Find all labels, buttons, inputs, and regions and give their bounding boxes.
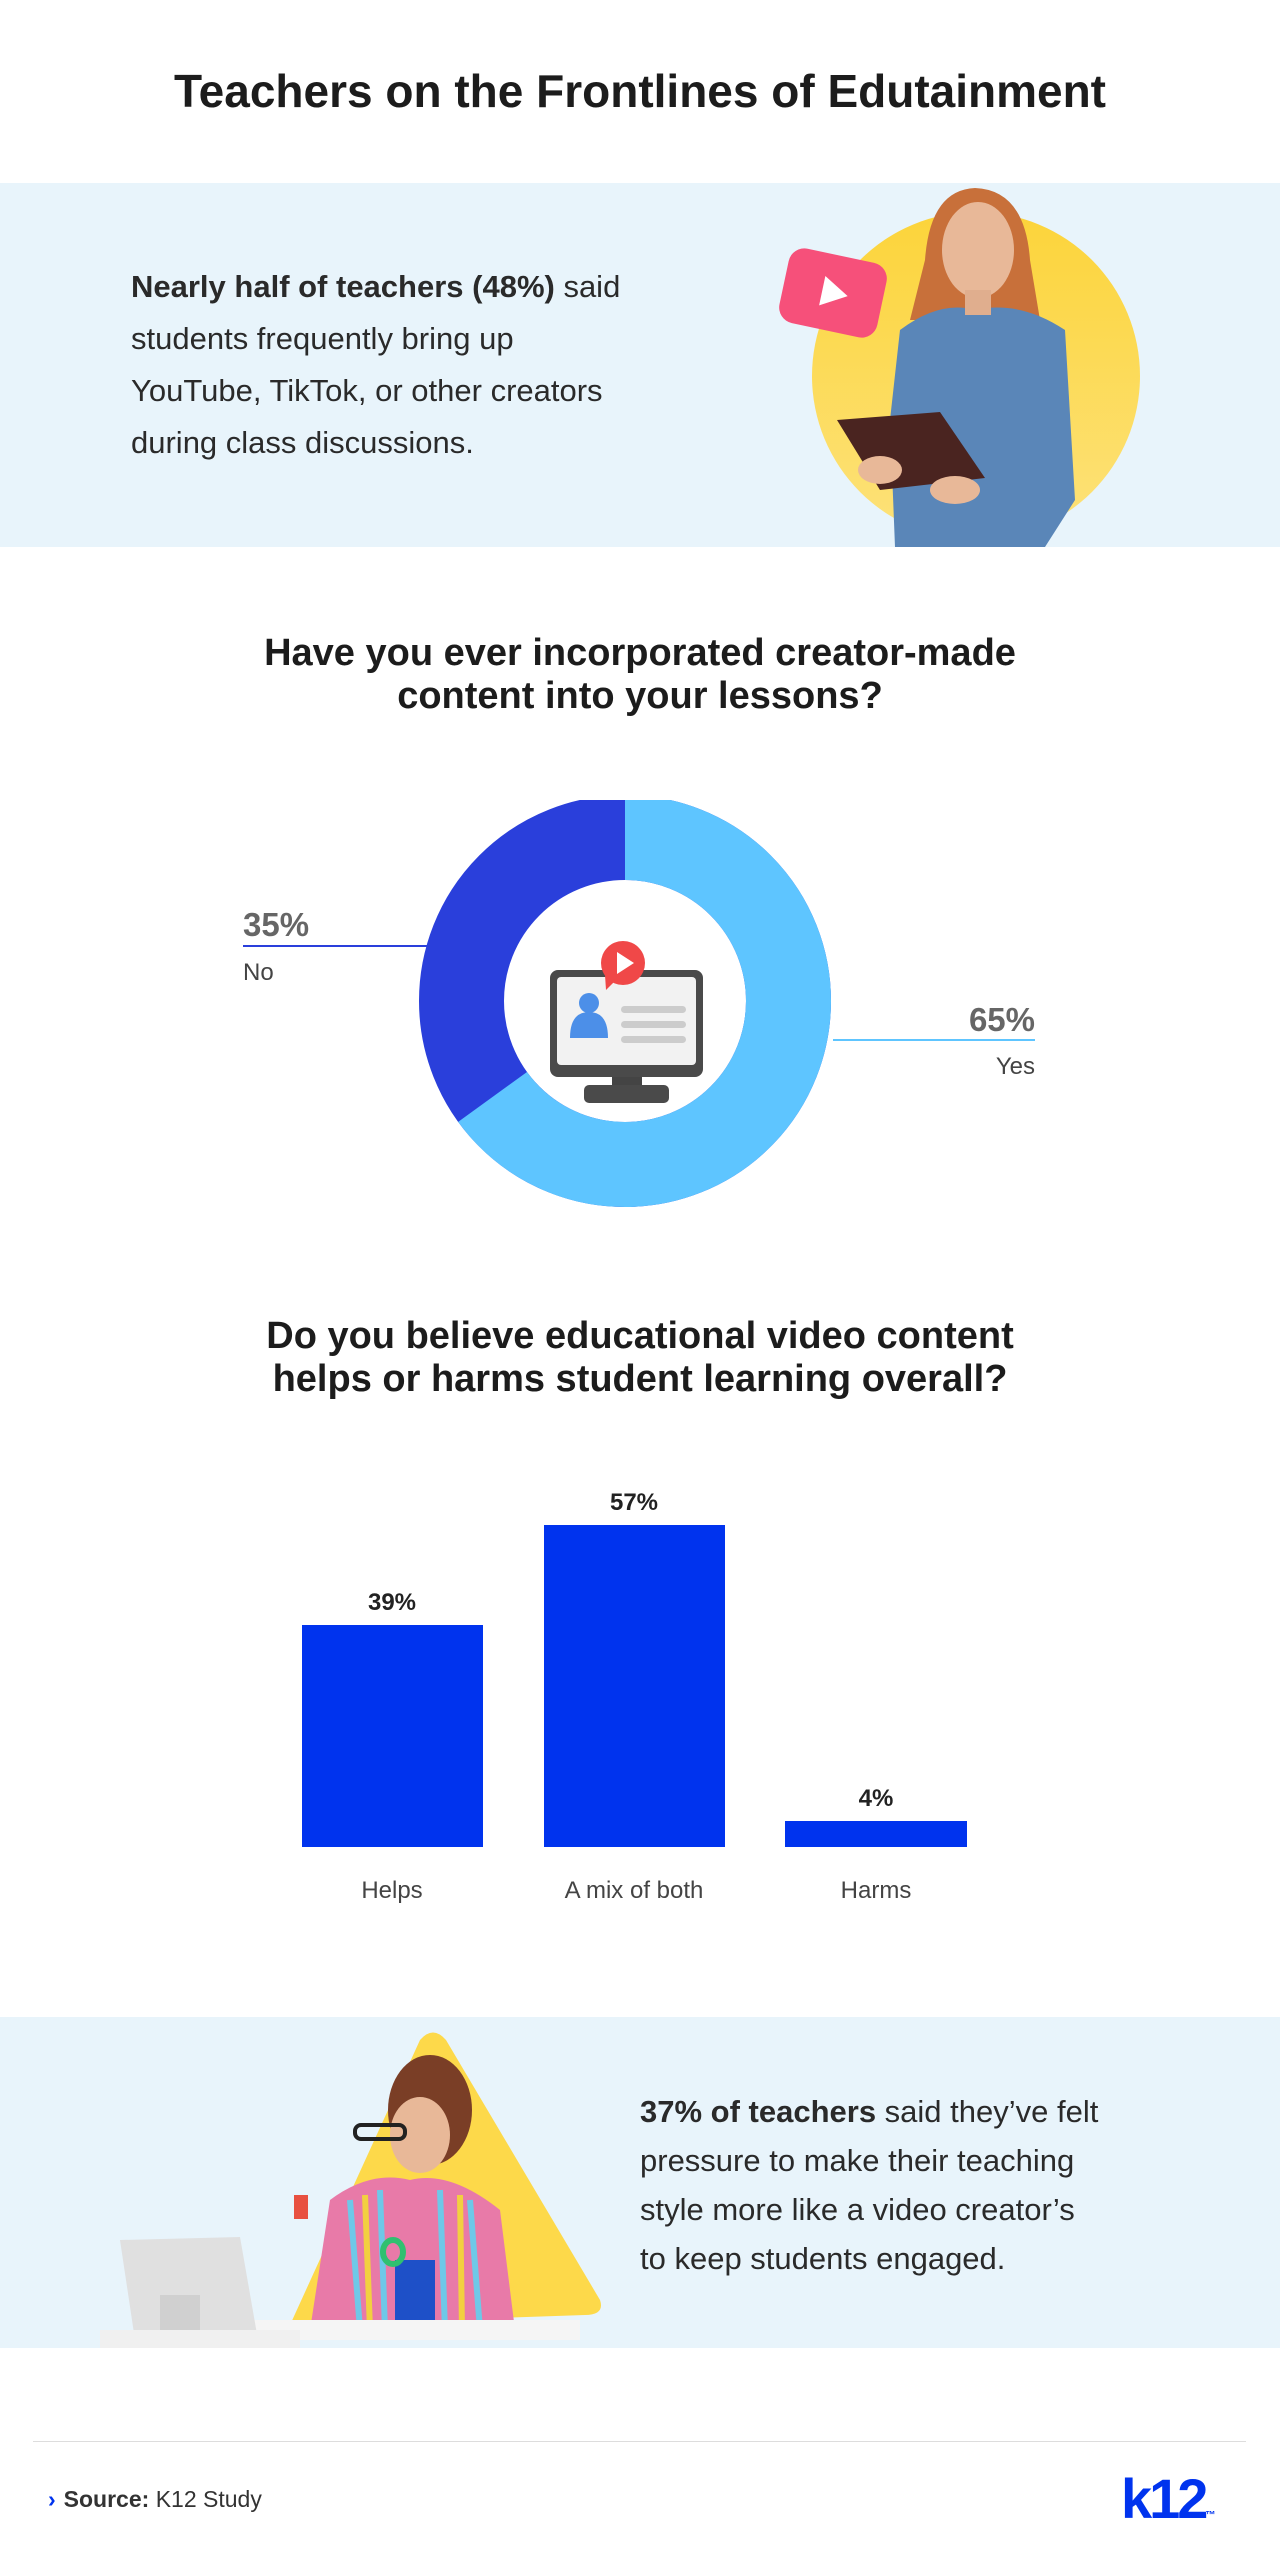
text block: 48% stat: YouTube, TikTok, or other creators (131, 373, 603, 408)
hair (910, 188, 1040, 320)
chart: bar chart (302, 1489, 967, 1904)
person (310, 2178, 515, 2330)
text block: 37% stat: pressure to make their teaching (640, 2143, 1074, 2178)
text block: 37% stat: 37% of teachers said they’ve felt (640, 2094, 1098, 2129)
text block: 37% stat: to keep students engaged. (640, 2241, 1005, 2276)
label: Yes: Yes (996, 1053, 1035, 1080)
footer: source: › Source: K12 Study (48, 2486, 262, 2512)
heading: question 1: Have you ever incorporated creator-made (264, 632, 1016, 674)
panel: top band (0, 183, 1280, 547)
heading: question 2 (266, 1315, 1014, 1400)
label: Yes: 65% (969, 1001, 1035, 1038)
illustration: teacher at laptop (100, 2032, 601, 2348)
chart: bar chart: 39% (368, 1589, 416, 1616)
chart: bar chart: Harms (841, 1877, 911, 1904)
heading: question 2: Do you believe educational video content (266, 1315, 1014, 1357)
text block: 37% stat: style more like a video creator’s (640, 2192, 1075, 2227)
clipboard (837, 412, 985, 490)
title: Teachers on the Frontlines of Edutainment (174, 65, 1106, 117)
chart: bar chart: A mix of both (565, 1877, 703, 1904)
desk & laptop (250, 2320, 580, 2340)
chart: bar chart: 4% (859, 1785, 893, 1812)
heading: question 1 (264, 632, 1016, 717)
label: No: 35% (243, 906, 309, 943)
text block: 37% stat (640, 2094, 1098, 2276)
text block: 48% stat: during class discussions. (131, 425, 474, 460)
text block: 48% stat: Nearly half of teachers (48%) said (131, 269, 620, 304)
heading: question 2: helps or harms student learning overall? (273, 1358, 1007, 1400)
text block: 48% stat (131, 269, 620, 460)
panel: bottom band (0, 2017, 1280, 2348)
label: No (243, 906, 433, 986)
chart: donut (243, 800, 1035, 1207)
label: No: No (243, 959, 274, 986)
heading: question 1: content into your lessons? (397, 675, 883, 717)
face (942, 202, 1014, 298)
icon: play tile (776, 245, 890, 341)
hands (858, 456, 902, 484)
icon: monitor (550, 941, 703, 1103)
logo: K12: k12™ (1121, 2467, 1215, 2530)
chart: bar chart: Helps (361, 1877, 423, 1904)
body shirt (890, 308, 1075, 547)
chart: bar chart: 57% (610, 1489, 658, 1516)
label: Yes (833, 1001, 1035, 1080)
text block: 48% stat: students frequently bring up (131, 321, 514, 356)
illustration: teacher with clipboard (779, 188, 1140, 547)
